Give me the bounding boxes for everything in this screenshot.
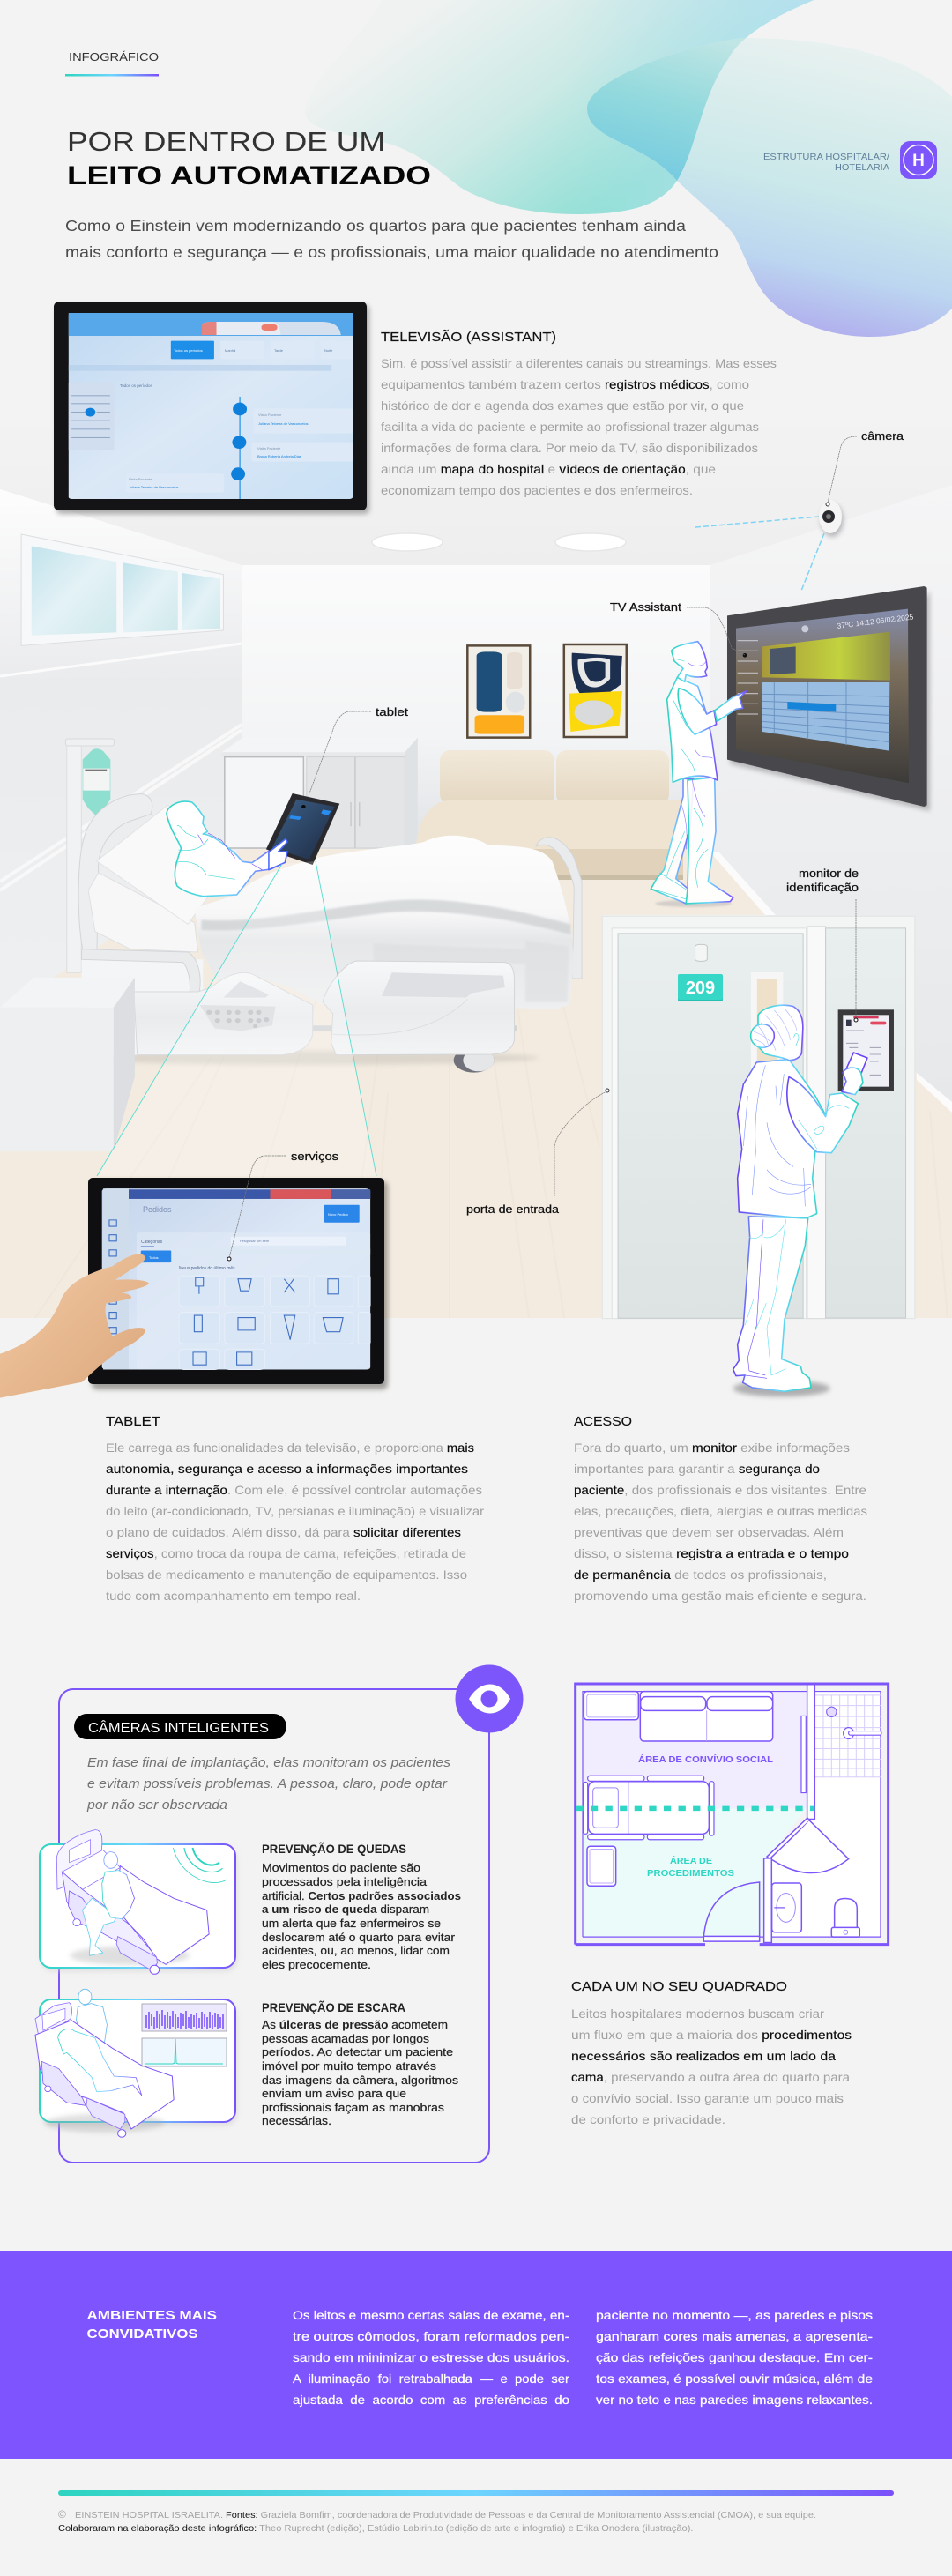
right wall: [710, 485, 952, 1111]
heading: acesso: ACESSO: [574, 1414, 632, 1429]
text: prevenção de escara: [262, 2001, 459, 2127]
label: monitor de identificação: monitor de: [799, 867, 859, 880]
panel: televisão screen: Juliana Teixeira de Vasconcelos: [258, 421, 309, 426]
label: tv assistant: [610, 600, 745, 655]
text block: acesso: elas, precauções, dieta, alergias e outras medidas: [574, 1504, 867, 1518]
panel: televisão screen: [54, 302, 369, 514]
banner text column 2: ganharam cores mais amenas, a apresenta-: [596, 2329, 873, 2343]
intro text: [65, 217, 718, 261]
footer credits: ©: [58, 2508, 66, 2520]
text block: televisão: economizam tempo dos pacientes e dos enfermeiros.: [381, 483, 693, 497]
text block: acesso: de permanência de todos os profissionais,: [574, 1567, 827, 1582]
text: prevenção de quedas: artificial. Certos padrões associados: [262, 1889, 461, 1902]
text block: televisão: [381, 356, 777, 497]
banner text column 2: paciente no momento —, as paredes e pisos: [596, 2308, 873, 2322]
banner text column 2: ção das refeições ganhou destaque. Em cer-: [596, 2350, 873, 2364]
hospital bed: [78, 794, 582, 1073]
banner heading: CONVIDATIVOS: [86, 2327, 197, 2341]
text: prevenção de quedas: deslocarem até o quarto para evitar: [262, 1931, 456, 1944]
panel: câmeras inteligentes: [35, 1664, 524, 2163]
text block: tablet: [106, 1441, 484, 1603]
ceiling: [0, 414, 952, 565]
banner text column 1: sando em minimizar o estresse dos usuários.: [293, 2350, 569, 2364]
banner text column 1: ajustada de acordo com as preferências do: [293, 2393, 569, 2407]
chart: motion signal: [142, 2004, 227, 2031]
panel: televisão screen: Visita Paciente: [257, 446, 281, 450]
label: procedures area: ÁREA DE: [670, 1855, 712, 1866]
text block: tablet: o plano de cuidados. Além disso, dá para solicitar diferentes: [106, 1525, 461, 1539]
large tablet with services screen: [88, 1178, 388, 1389]
text block: acesso: disso, o sistema registra a entrada e o tempo: [574, 1546, 849, 1560]
title: POR DENTRO DE UM: [67, 126, 385, 157]
text: prevenção de escara: pessoas acamadas por longos: [262, 2032, 430, 2045]
tablet held by patient: [266, 793, 339, 870]
text block: tablet: durante a internação . Com ele, é possível controlar automações: [106, 1483, 482, 1497]
banner heading: [86, 2308, 217, 2341]
banner text column 2: tos exames, é possível ouvir música, além de: [596, 2371, 873, 2386]
large tablet with services screen: Meus pedidos do último mês: [179, 1266, 235, 1271]
label: monitor de identificação: identificação: [786, 881, 859, 894]
large tablet with services screen: Pesquisar um item: [240, 1239, 270, 1243]
text block: tablet: bolsas de medicamento e manutenção de equipamentos. Isso: [106, 1567, 467, 1582]
footer credits: [58, 2508, 816, 2534]
heading: cada um no seu quadrado: CADA UM NO SEU QUADRADO: [571, 1979, 787, 1994]
heading pill: [74, 1714, 286, 1739]
label: serviços: [227, 1150, 339, 1261]
label: tablet: tablet: [376, 705, 408, 718]
text block: cada um no seu quadrado: de conforto e privacidade.: [571, 2112, 725, 2126]
text block: televisão: equipamentos também trazem certos registros médicos , como: [381, 377, 749, 391]
intro italic text: por não ser observada: [86, 1798, 227, 1813]
footer gradient bar: [58, 2490, 894, 2496]
label: porta de entrada: [466, 1089, 609, 1216]
ceiling lights: [372, 533, 626, 551]
text block: cada um no seu quadrado: um fluxo em que a maioria dos procedimentos: [571, 2028, 852, 2042]
text: prevenção de escara: imóvel por muito tempo através: [262, 2059, 437, 2073]
panel: televisão screen: Todos os períodos: [120, 383, 153, 388]
label: tv assistant: TV Assistant: [610, 600, 681, 614]
text block: cada um no seu quadrado: cama, preservando a outra área do quarto para: [571, 2070, 850, 2084]
text: prevenção de quedas: processados pela inteligência: [262, 1875, 428, 1888]
tv screen status: 37ºC 14:12 06/02/2025: [837, 612, 914, 630]
panel: televisão screen: Juliana Teixeira de Vasconcelos: [129, 485, 179, 489]
text: prevenção de escara: períodos. Ao detectar um paciente: [262, 2045, 453, 2059]
large tablet with services screen: Novo Pedido: [328, 1212, 349, 1217]
large tablet with services screen: Categorias: [141, 1240, 163, 1245]
text: prevenção de quedas: Movimentos do paciente são: [262, 1861, 420, 1874]
text block: televisão: informações de forma clara. Por meio da TV, são disponibilizados: [381, 441, 758, 455]
card: falls prevention illustration: [40, 1830, 237, 1974]
intro italic text: [86, 1755, 451, 1813]
label: câmera: câmera: [861, 429, 904, 443]
intro text: mais conforto e segurança — e os profissionais, uma maior qualidade no atendimento: [65, 243, 718, 261]
category tag: [763, 141, 937, 179]
text block: acesso: [574, 1441, 867, 1603]
panel: televisão screen: Noite: [324, 348, 333, 353]
section label: [65, 50, 159, 76]
title: LEITO AUTOMATIZADO: [67, 161, 431, 190]
label: procedures area: PROCEDIMENTOS: [647, 1868, 734, 1879]
text block: cada um no seu quadrado: Leitos hospitalares modernos buscam criar: [571, 2006, 824, 2021]
figure: nurse: [733, 1005, 867, 1396]
text block: acesso: paciente , dos profissionais e dos visitantes. Entre: [574, 1483, 866, 1497]
label: monitor de identificação: [786, 867, 859, 1022]
intro italic text: Em fase final de implantação, elas monitoram os pacientes: [87, 1755, 451, 1770]
paintings: [467, 644, 627, 738]
banner text column 2: ver no teto e nas paredes imagens relaxantes.: [596, 2393, 873, 2407]
banner text column 1: A iluminação foi retrabalhada — e pode ser: [293, 2371, 569, 2386]
heading: televisão: TELEVISÃO (ASSISTANT): [381, 330, 556, 345]
text: prevenção de escara: das imagens da câmera, algoritmos: [262, 2073, 459, 2087]
large tablet with services screen: Pedidos: [143, 1205, 172, 1214]
text block: televisão: histórico de dor e agenda dos exames que estão por vir, o que: [381, 398, 744, 413]
text block: tablet: tudo com acompanhamento em tempo real.: [106, 1589, 361, 1603]
projection lines to large tablet: [97, 861, 376, 1176]
label: tablet: [309, 705, 408, 793]
text block: televisão: Sim, é possível assistir a diferentes canais ou streamings. Mas esses: [381, 356, 777, 370]
figure: visitor touching tv: [651, 642, 747, 907]
panel: televisão screen: Tarde: [274, 348, 284, 353]
category tag: H: [912, 152, 925, 170]
text block: tablet: serviços, como troca da roupa de cama, refeições, retirada de: [106, 1546, 466, 1560]
floor plan: [576, 1684, 889, 1945]
text block: televisão: ainda um mapa do hospital e vídeos de orientação , que: [381, 462, 716, 476]
text: prevenção de escara: necessárias.: [262, 2114, 331, 2127]
text: prevenção de quedas: eles precocemente.: [262, 1958, 371, 1971]
panel: ambientes mais convidativos: [0, 2251, 952, 2459]
text: prevenção de escara: As úlceras de pressão acometem: [262, 2018, 448, 2031]
sofa: [416, 750, 683, 880]
text: prevenção de quedas: a um risco de queda disparam: [262, 1902, 429, 1916]
camera: [695, 436, 857, 591]
text block: tablet: Ele carrega as funcionalidades da televisão, e proporciona mais: [106, 1441, 474, 1455]
floor: [0, 849, 952, 1318]
text: prevenção de escara: PREVENÇÃO DE ESCARA: [262, 2001, 405, 2014]
panel: televisão screen: Visita Paciente: [129, 477, 152, 481]
label: procedures area: [647, 1855, 734, 1879]
banner text column 1: [293, 2308, 569, 2407]
intro italic text: e evitam possíveis problemas. A pessoa, claro, pode optar: [87, 1776, 448, 1791]
text block: cada um no seu quadrado: necessários são realizados em um lado da: [571, 2049, 836, 2063]
category tag: ESTRUTURA HOSPITALAR/: [763, 152, 889, 162]
back wall: [242, 565, 710, 852]
room number: [678, 974, 723, 1001]
intro text: Como o Einstein vem modernizando os quartos para que pacientes tenham ainda: [65, 217, 686, 235]
card: pressure injury prevention illustration: [35, 1989, 237, 2137]
text: prevenção de quedas: um alerta que faz enfermeiros se: [262, 1917, 441, 1930]
window: [21, 534, 223, 645]
panel: televisão screen: Manhã: [225, 348, 236, 353]
section label: INFOGRÁFICO: [69, 50, 159, 63]
category tag: HOTELARIA: [835, 162, 889, 173]
banner text column 2: [596, 2308, 873, 2407]
text: prevenção de escara: enviam um aviso para que: [262, 2087, 406, 2100]
heading pill: CÂMERAS INTELIGENTES: [88, 1719, 269, 1736]
text: prevenção de quedas: PREVENÇÃO DE QUEDAS: [262, 1843, 406, 1856]
hand touching tablet: [0, 1254, 149, 1398]
door assembly: [602, 916, 915, 1319]
panel: televisão screen: Todos os períodos: [174, 348, 203, 353]
panel: televisão screen: Bruna Roberta Andreia Dias: [257, 454, 301, 458]
text: prevenção de quedas: [262, 1843, 461, 1971]
icon: eye: [455, 1664, 524, 1733]
text: prevenção de quedas: acidentes, ou, ao menos, lidar com: [262, 1944, 450, 1957]
title: [67, 126, 431, 190]
text block: cada um no seu quadrado: [571, 2006, 852, 2126]
chart: immobility signal: [142, 2038, 227, 2066]
text block: cada um no seu quadrado: o convívio social. Isso garante um pouco mais: [571, 2091, 844, 2105]
text block: acesso: preventivas que devem ser observadas. Além: [574, 1525, 844, 1539]
decorative gradient blobs: [305, 0, 952, 337]
panel: televisão screen: Visita Paciente: [258, 413, 282, 417]
tv on the wall: [727, 586, 930, 811]
label: porta de entrada: porta de entrada: [466, 1202, 560, 1216]
room number: 209: [686, 979, 715, 998]
left wall: [0, 489, 242, 1040]
room illustration: [0, 414, 952, 1396]
figure: patient: [167, 801, 287, 897]
label: serviços: serviços: [291, 1150, 339, 1163]
text block: acesso: Fora do quarto, um monitor exibe informações: [574, 1441, 850, 1455]
footer credits: Colaboraram na elaboração deste infográfico: Theo Ruprecht (edição), Estúdio Labirin.to (edição de arte e infografia) e Erika Onodera (ilustração).: [58, 2523, 693, 2534]
text block: acesso: importantes para garantir a segurança do: [574, 1462, 820, 1476]
text block: tablet: do leito (ar-condicionado, TV, persianas e iluminação) e visualizar: [106, 1504, 484, 1518]
iv pole and bag: [65, 739, 114, 972]
footer credits: EINSTEIN HOSPITAL ISRAELITA. Fontes: Graziela Bomfim, coordenadora de Produtividade de Pessoas e da Central de Monitoramento Assistencial (CMOA), e sua equipe.: [75, 2510, 816, 2520]
text block: tablet: autonomia, segurança e acesso a informações importantes: [106, 1462, 468, 1476]
label: social area: ÁREA DE CONVÍVIO SOCIAL: [638, 1753, 774, 1765]
banner text column 1: tre outros cômodos, foram reformados pen-: [293, 2329, 569, 2343]
text: prevenção de escara: profissionais façam as manobras: [262, 2101, 445, 2114]
wardrobe and fridge: [221, 738, 418, 848]
text block: televisão: facilita a vida do paciente e permite ao profissional trazer algumas: [381, 420, 759, 434]
text block: acesso: promovendo uma gestão mais eficiente e segura.: [574, 1589, 866, 1603]
identification monitor: [838, 1009, 894, 1091]
banner text column 1: Os leitos e mesmo certas salas de exame, en-: [293, 2308, 569, 2322]
banner heading: AMBIENTES MAIS: [86, 2308, 217, 2323]
heading: tablet: TABLET: [106, 1414, 160, 1429]
large tablet with services screen: Todos: [149, 1255, 159, 1260]
nightstand: [0, 978, 135, 1151]
